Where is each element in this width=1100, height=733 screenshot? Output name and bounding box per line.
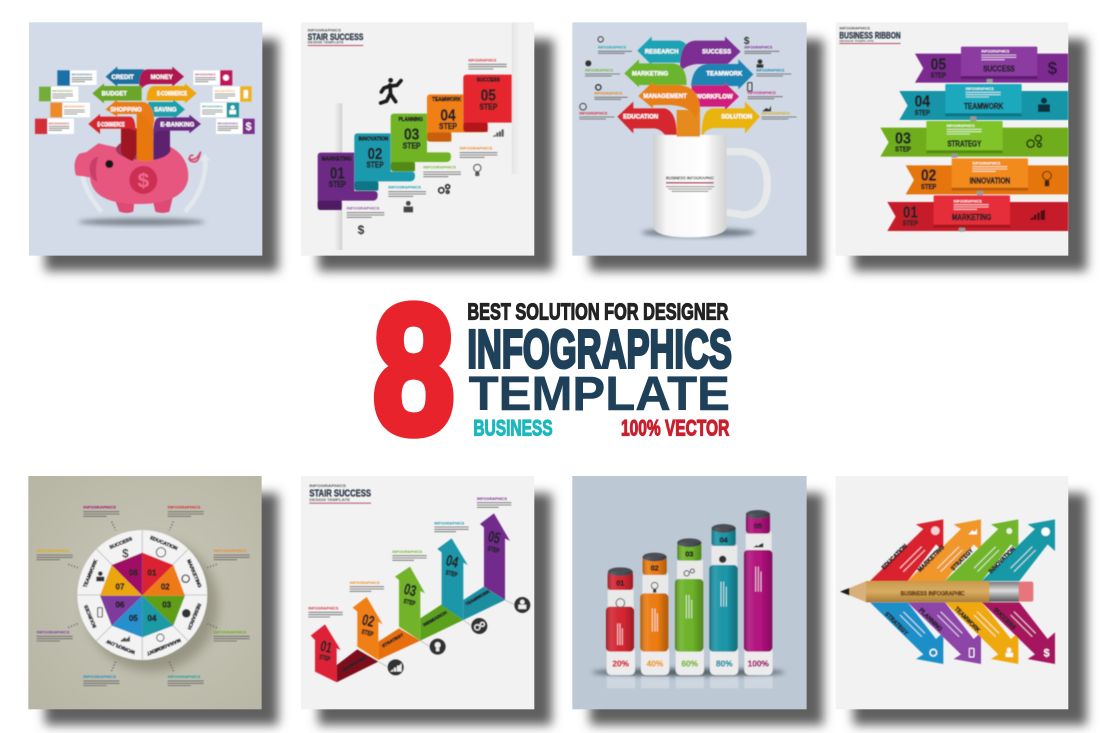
wheel segments: 07 [116, 582, 125, 591]
panel background [28, 476, 262, 709]
step 04: 04 [440, 107, 456, 124]
header [839, 27, 901, 44]
floor shadow and reflections [592, 669, 785, 688]
wheel segments [100, 553, 185, 637]
arrow: marketing [624, 59, 687, 87]
side labels left: INFOGRAPHICS [585, 68, 614, 72]
outer labels: INFOGRAPHICS [214, 548, 247, 553]
arrow: management [638, 82, 700, 118]
callouts right [193, 70, 255, 134]
numeral 8: 8 [373, 267, 455, 472]
ribbon 03: STRATEGY [947, 140, 982, 149]
ribbon 04: 04 [915, 94, 930, 111]
cylinder 03: 03 [685, 550, 693, 559]
cylinder 02: 02 [651, 564, 659, 573]
floor shadow [78, 218, 205, 226]
lower arrows [870, 602, 1055, 664]
icon: person [404, 201, 413, 212]
piggy bank: $ [138, 170, 150, 193]
ring icons: $ [122, 547, 129, 561]
ribbon 01: MARKETING [952, 213, 991, 222]
arrow 03: 03 [402, 581, 418, 600]
icon: chart [492, 129, 504, 137]
floor strips: MARKETING [341, 655, 368, 673]
side labels right: INFOGRAPHICS [748, 91, 776, 95]
arrow 04: STEP [445, 569, 458, 579]
ring labels: RESEARCH [185, 602, 202, 631]
arrow: e-commerce right: E-COMMERCE [157, 91, 187, 97]
arrow 05: 05 [486, 528, 502, 548]
ribbon 05: 05 [931, 56, 946, 73]
coloured stems [121, 113, 170, 161]
arrow: money: MONEY [151, 75, 173, 81]
wheel segments: 08 [129, 568, 138, 577]
ribbon 04: STEP [915, 108, 930, 117]
info labels: INFOGRAPHICS [392, 550, 423, 554]
wheel shadow [85, 538, 218, 672]
cylinder 03 [675, 538, 704, 675]
panel: circular wheel [28, 476, 278, 725]
fold shading [334, 22, 520, 250]
ribbon 04: TEAMWORK [964, 102, 1004, 111]
header: DESIGN TEMPLATE [308, 41, 345, 45]
pencil [840, 581, 1033, 602]
cylinder 05: 05 [754, 521, 762, 530]
arrow 05 [480, 513, 510, 600]
step 02 [354, 133, 415, 191]
step 04: TEAMWORK [432, 97, 461, 103]
step 03: 03 [404, 127, 419, 144]
panel background [301, 22, 534, 256]
arrow: teamwork [691, 59, 753, 89]
arrow 05: STEP [487, 545, 500, 555]
step 01: MARKETING [322, 156, 352, 162]
callouts left: INFOGRAPHICS [52, 89, 73, 93]
pencil contents [840, 519, 1055, 664]
arrow: e-commerce right [147, 83, 197, 103]
arrow: research: RESEARCH [645, 49, 678, 55]
arrow: saving [148, 99, 185, 119]
label: vector: 100% VECTOR [621, 415, 729, 440]
icon: dollar: $ [358, 223, 365, 237]
arrow: teamwork: TEAMWORK [706, 72, 743, 78]
header [308, 27, 363, 46]
cylinder 05 [744, 510, 773, 675]
arrow: e-commerce left [88, 114, 136, 134]
ring labels: EDUCATION [149, 535, 179, 552]
step 01: 01 [330, 165, 345, 182]
panel: piggy bank infographic [29, 22, 278, 271]
step 05 [463, 75, 512, 132]
step 02: 02 [368, 146, 382, 163]
floor strips: STRATEGY [381, 632, 404, 649]
wheel segments: 06 [116, 600, 125, 609]
label: business: BUSINESS [473, 415, 553, 440]
stem [677, 110, 700, 137]
header: DESIGN TEMPLATE [309, 498, 351, 502]
wheel segments: 05 [129, 614, 138, 623]
ribbon 01: 01 [903, 204, 918, 221]
info text blocks: INFOGRAPHICS [468, 59, 497, 63]
header: BUSINESS RIBBON [839, 30, 901, 40]
ribbon 02: STEP [921, 182, 936, 191]
panel background [301, 476, 534, 709]
cylinder 01 [606, 567, 635, 675]
step 03: STEP [403, 141, 421, 150]
info text blocks: INFOGRAPHICS [388, 185, 422, 189]
outer labels: INFOGRAPHICS [83, 674, 116, 679]
floor strips: TEAMWORK [464, 588, 491, 607]
side labels right: INFOGRAPHICS [762, 111, 790, 115]
ring icons [96, 547, 191, 642]
step 03: PLANNING [398, 117, 423, 123]
small icons: $ [744, 36, 750, 47]
upper arrows [870, 519, 1055, 581]
ring labels: SUCCESS [109, 536, 134, 551]
arrow 02: 02 [360, 612, 376, 631]
ribbon 02: INFOGRAPHICS [972, 161, 1001, 165]
callouts left: INFOGRAPHICS [49, 121, 69, 125]
cylinder 02: 40% [647, 659, 664, 669]
ribbon 05: INFOGRAPHICS [981, 50, 1010, 54]
ribbon 01 [887, 195, 1068, 232]
mug: BUSINESS INFOGRAPHIC [666, 175, 714, 181]
ribbon 01: STEP [903, 219, 918, 228]
cylinder 05: 100% [748, 659, 770, 669]
outer labels: INFOGRAPHICS [168, 674, 201, 679]
arrow: credit [106, 67, 144, 87]
panel background [572, 22, 807, 256]
ribbon 02: 02 [921, 168, 936, 185]
center title block [373, 267, 732, 472]
step 02: STEP [366, 161, 384, 170]
arrow: e-banking: E-BANKING [160, 122, 195, 128]
wheel ring [77, 530, 207, 660]
ribbon 05: STEP [931, 71, 946, 80]
dotted leaders [68, 522, 217, 671]
arrow: workflow [692, 83, 739, 110]
panel: pencil arrows [836, 476, 1087, 725]
icon: bulb [474, 164, 481, 176]
arrow 01 [311, 624, 341, 682]
mug contents [579, 36, 797, 237]
step 05: STEP [479, 102, 498, 111]
arrow: solution: SOLUTION [721, 114, 752, 120]
cylinder 01: 20% [612, 659, 630, 669]
step 01 [318, 153, 378, 210]
info labels: INFOGRAPHICS [350, 581, 380, 585]
arrow: e-banking [153, 115, 201, 136]
side labels left: INFOGRAPHICS [598, 46, 627, 50]
icon: runner [381, 78, 401, 103]
arrow: education [617, 102, 677, 135]
side labels left: INFOGRAPHICS [579, 111, 608, 115]
arrow 04 [437, 538, 468, 620]
outer labels: INFOGRAPHICS [37, 629, 70, 634]
arrow: budget [92, 83, 142, 103]
lower arrows: $ [1044, 647, 1050, 659]
ring labels [82, 535, 202, 656]
callouts right: INFOGRAPHICS [218, 121, 238, 125]
outer labels: INFOGRAPHICS [214, 629, 247, 634]
outer labels: INFOGRAPHICS [83, 505, 116, 510]
heading: infographics: INFOGRAPHICS [467, 319, 732, 379]
cylinder 04: 80% [716, 659, 733, 669]
arrow: money [139, 67, 184, 92]
header: STAIR SUCCESS [309, 489, 371, 500]
side labels right: INFOGRAPHICS [744, 46, 773, 50]
step 03 [391, 114, 451, 171]
panel: mug infographic [572, 22, 823, 271]
info text blocks: INFOGRAPHICS [347, 206, 380, 210]
arrow: shopping [106, 99, 154, 129]
panel: cylinder bars [572, 476, 823, 725]
callouts left: INFOGRAPHICS [72, 73, 92, 77]
piggy bank [75, 139, 201, 213]
up arrows behind piggy [77, 153, 210, 212]
arrow 03: STEP [403, 598, 416, 608]
panel background [29, 22, 262, 256]
ribbon 03: 03 [895, 130, 911, 147]
outer labels [37, 505, 250, 686]
mug [653, 135, 767, 237]
panel: stair success steps [301, 22, 553, 271]
ribbon 02: INNOVATION [970, 176, 1010, 185]
callouts right: $ [246, 121, 252, 133]
ribbon 05: SUCCESS [983, 65, 1015, 74]
lower arrows: PLANNING [917, 607, 944, 633]
ribbon 01: INFOGRAPHICS [954, 199, 982, 203]
header: INFOGRAPHICS [309, 483, 346, 488]
upper arrows: STRATEGY [950, 547, 975, 572]
arrow: education: EDUCATION [623, 114, 658, 120]
header: INFOGRAPHICS [308, 27, 341, 32]
cylinder 04: 04 [720, 535, 729, 544]
callouts right: INFOGRAPHICS [195, 73, 216, 77]
header: DESIGN TEMPLATE [839, 39, 874, 43]
ribbon 05 [915, 47, 1068, 83]
wheel segments: 03 [162, 600, 172, 609]
panel: isometric arrows stair [301, 476, 552, 725]
arrow: e-commerce left: E-COMMERCE [97, 122, 125, 128]
info labels [308, 497, 511, 617]
panel background [836, 476, 1068, 709]
arrow: credit: CREDIT [112, 75, 134, 81]
ribbon contents [839, 27, 1068, 232]
floor strips [337, 587, 505, 682]
step 04 [427, 94, 488, 142]
pencil: BUSINESS INFOGRAPHIC [901, 592, 965, 598]
arrow: success: SUCCESS [702, 49, 731, 55]
wheel segments: 01 [148, 568, 157, 577]
info text blocks: INFOGRAPHICS [423, 166, 457, 170]
wheel segments: 04 [148, 614, 157, 623]
upper arrows: MARKETING [916, 544, 946, 574]
step 05: 05 [481, 88, 496, 105]
callouts left [35, 70, 97, 134]
arrow 01: 01 [319, 639, 333, 657]
step 01: STEP [329, 180, 347, 189]
cylinder 02 [640, 553, 669, 675]
arrow 02 [353, 597, 383, 660]
ribbon 03 [880, 121, 1068, 158]
step 05: SUCCESS [477, 77, 500, 83]
lower arrows: STRATEGY [883, 611, 910, 637]
callouts right: INFOGRAPHICS [202, 105, 223, 109]
heading: template: TEMPLATE [469, 367, 730, 421]
arrow: shopping: SHOPPING [110, 108, 142, 114]
arrow 03 [395, 567, 425, 641]
panel background [836, 22, 1068, 256]
info labels: INFOGRAPHICS [434, 521, 465, 525]
ring labels: MANAGEMENT [146, 637, 182, 656]
arrow: success [680, 37, 741, 73]
lower arrows: TEAMWORK [953, 606, 982, 634]
upper arrows: EDUCATION [881, 543, 909, 572]
heading: best solution: BEST SOLUTION FOR DESIGNER [467, 298, 728, 324]
piggy contents [35, 67, 255, 226]
stair contents [308, 27, 512, 237]
side labels left: INFOGRAPHICS [594, 92, 623, 96]
info text blocks [347, 59, 507, 217]
arrow: workflow: WORKFLOW [696, 94, 733, 100]
arrows contents [308, 483, 530, 682]
ring labels: MARKETING [185, 559, 202, 589]
callouts left: INFOGRAPHICS [64, 105, 85, 109]
arrow 02: STEP [361, 629, 374, 638]
step 02: INNOVATION [358, 136, 388, 142]
ring labels: SOURCES [83, 603, 98, 629]
arrow: solution [702, 102, 760, 135]
icon badges [378, 597, 530, 675]
ribbon 04: INFOGRAPHICS [966, 87, 994, 91]
cylinder 04 [709, 524, 738, 675]
floor strips: RESEARCH [422, 610, 448, 628]
arrow: marketing: MARKETING [632, 72, 668, 78]
header [309, 483, 371, 504]
cylinder 03: 60% [681, 659, 699, 669]
mug shadow [642, 228, 755, 237]
info text blocks: INFOGRAPHICS [460, 146, 493, 150]
ring labels: TEAMWORK [82, 558, 100, 589]
ribbon 05: $ [1047, 58, 1057, 78]
ribbon 04 [899, 84, 1068, 121]
cylinder contents [592, 510, 785, 688]
wheel segments: 02 [161, 582, 170, 591]
arrow: saving: SAVING [154, 108, 177, 114]
arrow: budget: BUDGET [102, 91, 127, 97]
header: INFOGRAPHICS [839, 27, 871, 31]
ring labels: WORKFLOW [106, 638, 136, 655]
cylinder 01: 01 [616, 579, 624, 588]
panel background [572, 476, 807, 709]
icon: gears [439, 185, 450, 193]
outer labels: INFOGRAPHICS [168, 505, 201, 510]
wheel contents [37, 505, 250, 686]
ribbon 02 [906, 158, 1068, 195]
side labels right [744, 46, 797, 119]
arrow 01: STEP [318, 654, 331, 663]
outer labels: INFOGRAPHICS [37, 548, 70, 553]
header: STAIR SUCCESS [308, 32, 363, 42]
arrow: research [637, 37, 688, 65]
arrow 04: 04 [444, 552, 460, 572]
arrow: management: MANAGEMENT [643, 94, 687, 100]
step 04: STEP [439, 122, 458, 131]
ribbon 03: STEP [895, 145, 911, 154]
info labels: INFOGRAPHICS [477, 497, 508, 501]
side labels left [579, 46, 632, 119]
lower arrows: SUCCESS [992, 606, 1017, 631]
small icons [580, 36, 771, 111]
info labels: INFOGRAPHICS [308, 607, 339, 611]
ribbon 03: INFOGRAPHICS [947, 124, 975, 128]
panel: business ribbon [836, 22, 1087, 271]
upper arrows: INNOVATION [987, 545, 1017, 575]
callouts right: INFOGRAPHICS [215, 89, 235, 93]
side labels right: INFOGRAPHICS [756, 68, 785, 72]
